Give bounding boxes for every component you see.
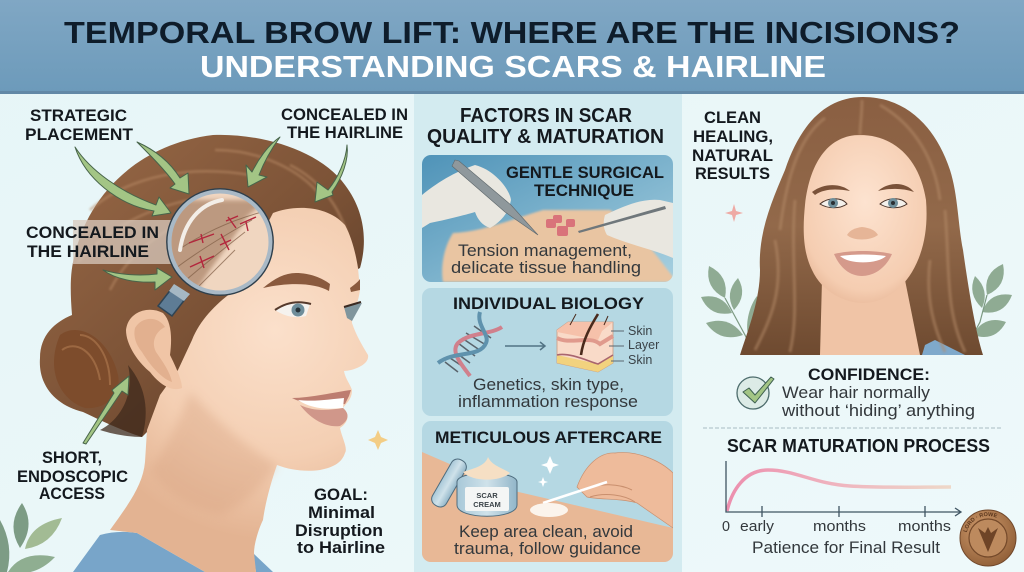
label: concealed in the hairline middle: CONCEALED IN	[26, 223, 159, 242]
panel: left profile illustration	[0, 105, 408, 572]
axis labels	[722, 519, 951, 535]
label: goal: GOAL:	[314, 485, 368, 504]
eye	[275, 302, 362, 321]
description: Tension management,	[458, 241, 632, 260]
label: goal: to Hairline	[297, 538, 385, 557]
heading	[506, 163, 664, 200]
label: concealed in the hairline middle	[26, 223, 159, 261]
skin labels	[628, 324, 659, 367]
neck	[820, 280, 920, 355]
label: short endoscopic access: ENDOSCOPIC	[17, 467, 128, 486]
line chart: scar maturation	[722, 461, 961, 535]
label: concealed in the hairline top: CONCEALED IN	[281, 105, 408, 124]
callout: confidence: Wear hair normally	[782, 383, 931, 402]
icon: sparkles	[538, 456, 559, 487]
ear	[126, 310, 182, 389]
scars	[189, 216, 256, 268]
label: goal: Minimal	[308, 503, 375, 522]
heading: METICULOUS AFTERCARE	[435, 428, 662, 447]
icon: bronze medal seal: LORD · ROWE	[963, 512, 998, 532]
mouth	[292, 390, 351, 426]
label: strategic placement: PLACEMENT	[25, 125, 134, 144]
axis labels: months	[813, 519, 866, 535]
subtitle: UNDERSTANDING SCARS & HAIRLINE	[200, 49, 826, 84]
label: concealed in the hairline top	[281, 105, 408, 142]
scalpel	[452, 160, 538, 235]
hand	[577, 452, 673, 528]
swab	[543, 482, 607, 503]
icon: pink sparkle	[725, 204, 743, 222]
smile	[834, 251, 892, 276]
label: strategic placement	[25, 106, 134, 144]
arrow	[505, 342, 545, 350]
title: TEMPORAL BROW LIFT: WHERE ARE THE INCISIONS?	[64, 15, 960, 50]
card: meticulous aftercare	[422, 421, 673, 562]
callout: confidence	[737, 365, 975, 420]
leaves left	[701, 266, 760, 345]
right glove	[604, 200, 673, 258]
description	[458, 375, 638, 411]
description	[454, 522, 641, 558]
scrub top	[73, 532, 273, 572]
heading: factors in scar quality	[427, 105, 664, 148]
heading: factors in scar quality: QUALITY & MATURATION	[427, 126, 664, 148]
tissue	[546, 215, 575, 236]
icon: leaves bottom left	[0, 503, 62, 572]
jaw shadow	[150, 392, 277, 515]
face	[804, 135, 927, 303]
description: trauma, follow guidance	[454, 539, 641, 558]
card: gentle surgical technique	[422, 155, 673, 282]
icon: bronze medal seal	[960, 510, 1016, 566]
cream smear	[530, 503, 568, 517]
label: clean healing: RESULTS	[695, 164, 770, 183]
heading: GENTLE SURGICAL	[506, 163, 664, 182]
heading: scar maturation process: SCAR MATURATION PROCESS	[727, 436, 990, 456]
skin labels: Layer	[628, 338, 659, 352]
arm	[422, 452, 673, 562]
label: concealed in the hairline middle: THE HAIRLINE	[27, 242, 149, 261]
icon: scar cream jar: CREAM	[473, 500, 501, 509]
hair back	[740, 97, 983, 355]
icon: gold sparkle	[368, 430, 388, 450]
heading: factors in scar quality: FACTORS IN SCAR	[460, 105, 633, 127]
portrait of woman	[692, 97, 1012, 355]
description: Genetics, skin type,	[473, 375, 624, 394]
axis labels: early	[740, 519, 775, 535]
label: clean healing: HEALING,	[693, 127, 773, 146]
description	[451, 241, 641, 277]
icon: check mark	[737, 377, 774, 409]
icon: magnifying glass	[158, 189, 273, 316]
skin area	[442, 210, 673, 282]
axis labels: months	[898, 519, 951, 535]
heading: TECHNIQUE	[534, 181, 634, 200]
icon: DNA helix	[438, 312, 502, 376]
label: goal	[295, 485, 385, 557]
label: concealed in the hairline top: THE HAIRLINE	[287, 123, 403, 142]
eyes	[820, 198, 907, 208]
callout: confidence: without ‘hiding’ anything	[781, 401, 975, 420]
hair strands	[755, 100, 965, 352]
skin labels: Skin	[628, 353, 652, 367]
brows	[812, 184, 914, 195]
nose	[847, 227, 878, 240]
hair and bun	[40, 135, 364, 437]
label: clean healing	[692, 108, 773, 183]
callout: confidence: CONFIDENCE:	[808, 365, 930, 384]
face and neck	[110, 208, 368, 572]
heading: INDIVIDUAL BIOLOGY	[453, 294, 645, 313]
card: individual biology	[422, 288, 673, 416]
panel: right result column	[692, 97, 1016, 566]
label: short endoscopic access: ACCESS	[39, 484, 105, 503]
leaves right	[972, 264, 1012, 337]
label: clean healing: CLEAN	[704, 108, 761, 127]
shirt	[922, 340, 965, 355]
header banner	[0, 0, 1024, 94]
label: strategic placement: STRATEGIC	[30, 106, 127, 125]
icon: skin cross section	[557, 314, 624, 372]
label: clean healing: NATURAL	[692, 146, 773, 165]
label: goal: Disruption	[295, 521, 383, 540]
axis labels: 0	[722, 519, 730, 535]
caption: patience: Patience for Final Result	[752, 538, 940, 557]
description: inflammation response	[458, 392, 638, 411]
callout band behind label	[73, 220, 173, 264]
forceps	[578, 206, 666, 233]
icon: scar cream jar	[429, 456, 517, 516]
label: short endoscopic access: SHORT,	[42, 448, 102, 467]
finger lines	[590, 484, 636, 502]
description: Keep area clean, avoid	[459, 522, 633, 541]
label: short endoscopic access	[17, 448, 128, 503]
left glove	[422, 165, 511, 228]
skin labels: Skin	[628, 324, 652, 338]
icon: scar cream jar: SCAR	[476, 491, 498, 500]
panel: factors column	[414, 94, 682, 572]
description: delicate tissue handling	[451, 258, 641, 277]
eyebrow	[263, 273, 360, 292]
arrows: green callouts	[75, 137, 347, 444]
